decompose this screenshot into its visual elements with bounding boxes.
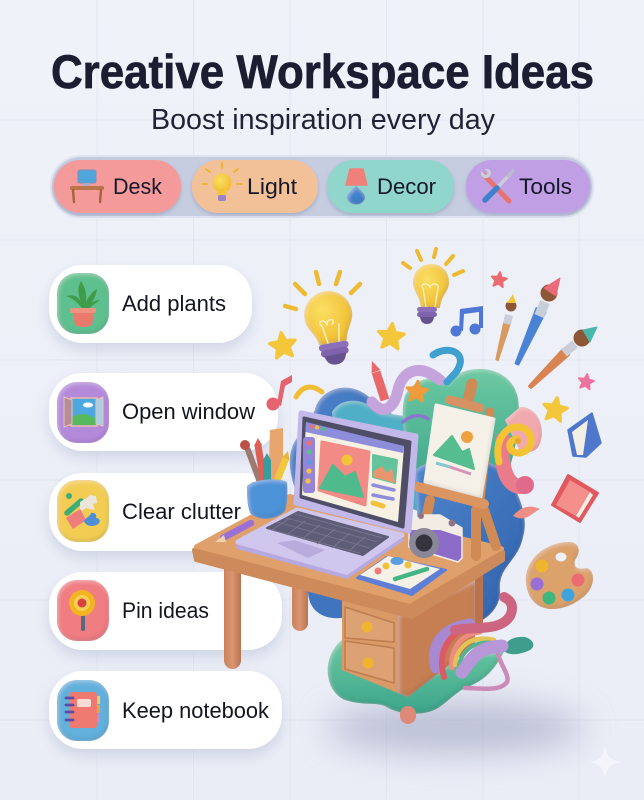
desk right side xyxy=(398,580,475,697)
desk back corner post xyxy=(472,575,483,625)
keyboard xyxy=(267,512,388,555)
stars xyxy=(268,271,595,422)
label: add plants: Add plants xyxy=(122,291,226,316)
icon: potted plant xyxy=(57,273,109,334)
icon: rainbow ribbons xyxy=(434,597,512,689)
label: keep notebook: Keep notebook xyxy=(122,698,270,723)
ground shadow xyxy=(325,702,585,754)
subtitle: Boost inspiration every day xyxy=(151,104,495,136)
icon: wrench and screwdriver xyxy=(481,169,513,201)
green cloud blob xyxy=(403,369,519,490)
icon: red book xyxy=(552,475,598,522)
icon: small paint brush xyxy=(496,294,516,360)
icon: lamp xyxy=(346,169,367,205)
icon: light bulb xyxy=(202,163,242,201)
pill: decor xyxy=(327,160,454,213)
icon: blue paint brush xyxy=(516,278,560,365)
light blue blob xyxy=(332,401,440,520)
label: clear clutter: Clear clutter xyxy=(122,499,241,524)
icon: clutter xyxy=(57,480,109,542)
card: pin ideas xyxy=(49,572,282,650)
icon: large light bulb xyxy=(285,272,361,369)
pink foot xyxy=(400,706,416,724)
trackpad xyxy=(277,540,325,558)
panel: desk xyxy=(194,497,503,697)
decoration: sparkle xyxy=(590,746,620,778)
back leg xyxy=(292,570,308,631)
main picture xyxy=(319,442,369,505)
pill label: Decor: Decor xyxy=(377,174,436,199)
red pencil xyxy=(372,361,385,400)
icon: paint palette xyxy=(526,542,593,609)
small arc on blob xyxy=(403,416,428,422)
canvas xyxy=(425,405,494,497)
icon: laptop xyxy=(236,413,416,579)
icon: camera xyxy=(409,513,462,562)
teal tail xyxy=(505,637,533,654)
ruler xyxy=(268,428,283,492)
front left leg xyxy=(224,560,241,669)
blue hook xyxy=(433,350,460,382)
icon: easel xyxy=(418,384,496,556)
sidebar xyxy=(303,437,315,493)
drawer: top xyxy=(345,607,394,642)
small picture xyxy=(373,455,397,483)
icon: small light bulb xyxy=(403,249,463,324)
illustration: creative desk scene xyxy=(194,249,601,754)
pill label: Light: Light xyxy=(247,174,297,199)
pink swirl xyxy=(498,407,542,494)
desk top xyxy=(197,497,501,602)
orange star xyxy=(406,380,428,402)
panel: category tray xyxy=(51,156,593,217)
yellow arc xyxy=(296,387,322,397)
icon: purple pencil xyxy=(215,523,251,542)
blue cloud blob xyxy=(290,388,400,560)
icon: orange paint brush xyxy=(529,327,597,388)
pill: light xyxy=(192,160,318,213)
icon: note pad xyxy=(357,556,446,595)
text lines xyxy=(373,485,394,499)
icon: push pin xyxy=(57,580,109,641)
icon: window xyxy=(57,382,109,443)
green base blob xyxy=(328,638,505,714)
screen frame xyxy=(296,413,416,531)
icon: pencil cup xyxy=(240,428,290,519)
panel: checklist cards xyxy=(49,265,282,749)
small pink blob xyxy=(513,507,540,518)
icon: red music note xyxy=(266,375,292,410)
blue blob under desk xyxy=(308,590,350,618)
pill label: Desk: Desk xyxy=(113,174,163,199)
blue wave xyxy=(415,458,525,625)
card: open window xyxy=(49,373,278,451)
card: keep notebook xyxy=(49,671,282,749)
card: add plants xyxy=(49,265,252,343)
drawer: bottom xyxy=(345,641,394,683)
tray background xyxy=(51,156,593,217)
card: clear clutter xyxy=(49,473,278,551)
icon: desk with monitor xyxy=(70,170,104,202)
pill: desk xyxy=(54,160,181,213)
icon: blue book xyxy=(568,413,601,457)
lavender swirl xyxy=(372,371,440,409)
icon: notebook xyxy=(57,680,109,741)
pill label: Tools: Tools xyxy=(519,174,572,199)
title: Creative Workspace Ideas xyxy=(51,45,594,98)
pill: tools xyxy=(466,160,590,213)
icon: blue music note xyxy=(450,306,483,336)
laptop base xyxy=(238,510,402,573)
label: pin ideas: Pin ideas xyxy=(122,598,209,623)
drawer box xyxy=(342,598,398,693)
label: open window: Open window xyxy=(122,399,255,424)
desk front edge xyxy=(194,550,503,617)
screen xyxy=(302,423,404,522)
title bar xyxy=(306,422,404,453)
